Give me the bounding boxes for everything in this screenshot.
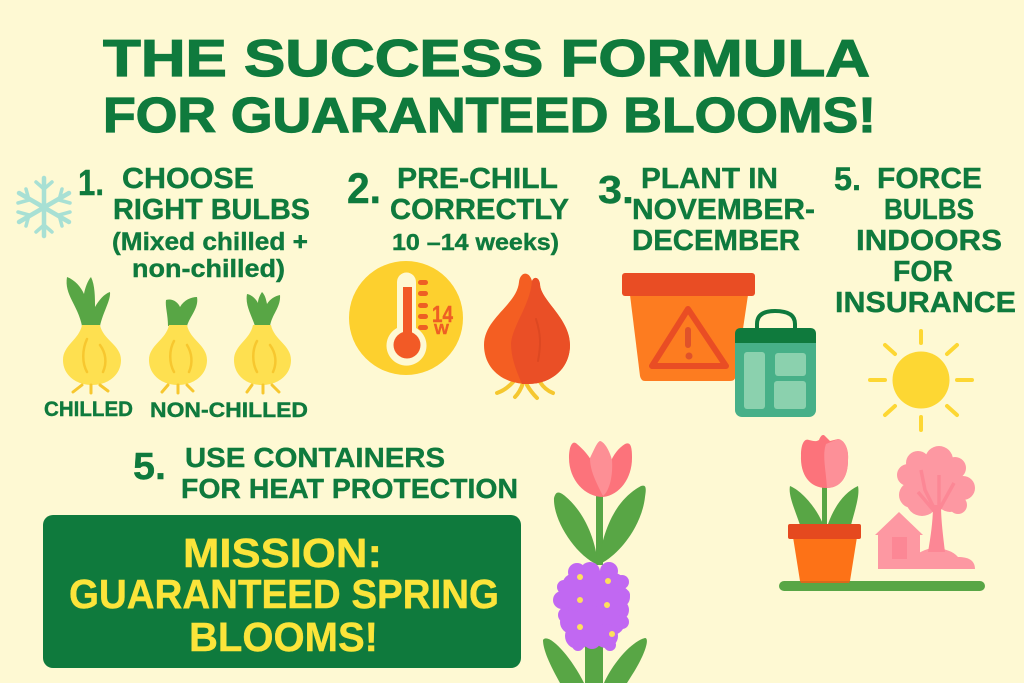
icon: non-chilled bulb with sprouts (234, 292, 291, 393)
icon: tulip plant (554, 441, 646, 565)
step 5 force bulbs heading: FORCE (877, 163, 982, 195)
icon: sun (870, 331, 972, 430)
title (103, 30, 876, 143)
label: chilled: CHILLED (44, 398, 133, 421)
icon: thermometer badge (349, 261, 463, 375)
step 3 heading: PLANT IN (641, 163, 778, 195)
step 5 force bulbs heading (834, 161, 1016, 319)
mission banner: BLOOMS! (189, 614, 378, 660)
icon: potted tulip on shelf (779, 435, 985, 591)
step 1 heading: (Mixed chilled + (112, 228, 308, 256)
icon: warning pot (622, 273, 755, 381)
step 1 heading: non-chilled) (132, 255, 285, 283)
step 1 heading: RIGHT BULBS (113, 194, 310, 226)
title: FOR GUARANTEED BLOOMS! (103, 89, 876, 143)
step 3 heading: DECEMBER (632, 225, 800, 257)
step 3 heading (598, 163, 815, 257)
icon: hyacinth plant (543, 562, 647, 683)
icon: snowflake (18, 178, 70, 236)
step 2 heading: CORRECTLY (390, 194, 569, 226)
mission banner (43, 515, 521, 668)
icon: red bulb (484, 274, 570, 398)
step 3 heading: NOVEMBER- (632, 194, 815, 226)
step 5 force bulbs heading: BULBS (884, 194, 974, 226)
icon: pink house and tree (875, 446, 975, 569)
label: non-chilled: NON-CHILLED (150, 399, 308, 422)
icon: thermometer badge: 14 (432, 301, 453, 327)
step 5 force bulbs heading: INDOORS (856, 225, 1002, 257)
icon: non-chilled bulb (149, 297, 207, 393)
step 2 heading: 10 –14 weeks) (392, 229, 559, 255)
step 2 heading: PRE-CHILL (397, 163, 558, 195)
mission banner: GUARANTEED SPRING (69, 571, 499, 617)
step 5 containers heading: USE CONTAINERS (185, 442, 445, 473)
step 1 heading (78, 162, 310, 283)
step 5 containers heading (133, 442, 518, 504)
step 2 heading (347, 163, 569, 255)
icon: green storage bag (735, 311, 816, 417)
mission banner: MISSION: (183, 530, 382, 576)
step 1 heading: 1. (78, 162, 104, 203)
step 5 force bulbs heading: 5. (834, 161, 861, 197)
icon: thermometer badge: W (434, 321, 450, 338)
step 5 force bulbs heading: FOR (893, 256, 953, 288)
step 5 containers heading: 5. (133, 446, 166, 488)
step 3 heading: 3. (598, 169, 634, 212)
title: THE SUCCESS FORMULA (103, 30, 870, 88)
step 5 force bulbs heading: INSURANCE (835, 287, 1016, 319)
step 5 containers heading: FOR HEAT PROTECTION (181, 473, 518, 504)
icon: chilled bulb (63, 277, 121, 393)
step 2 heading: 2. (347, 165, 381, 213)
step 1 heading: CHOOSE (122, 163, 254, 195)
